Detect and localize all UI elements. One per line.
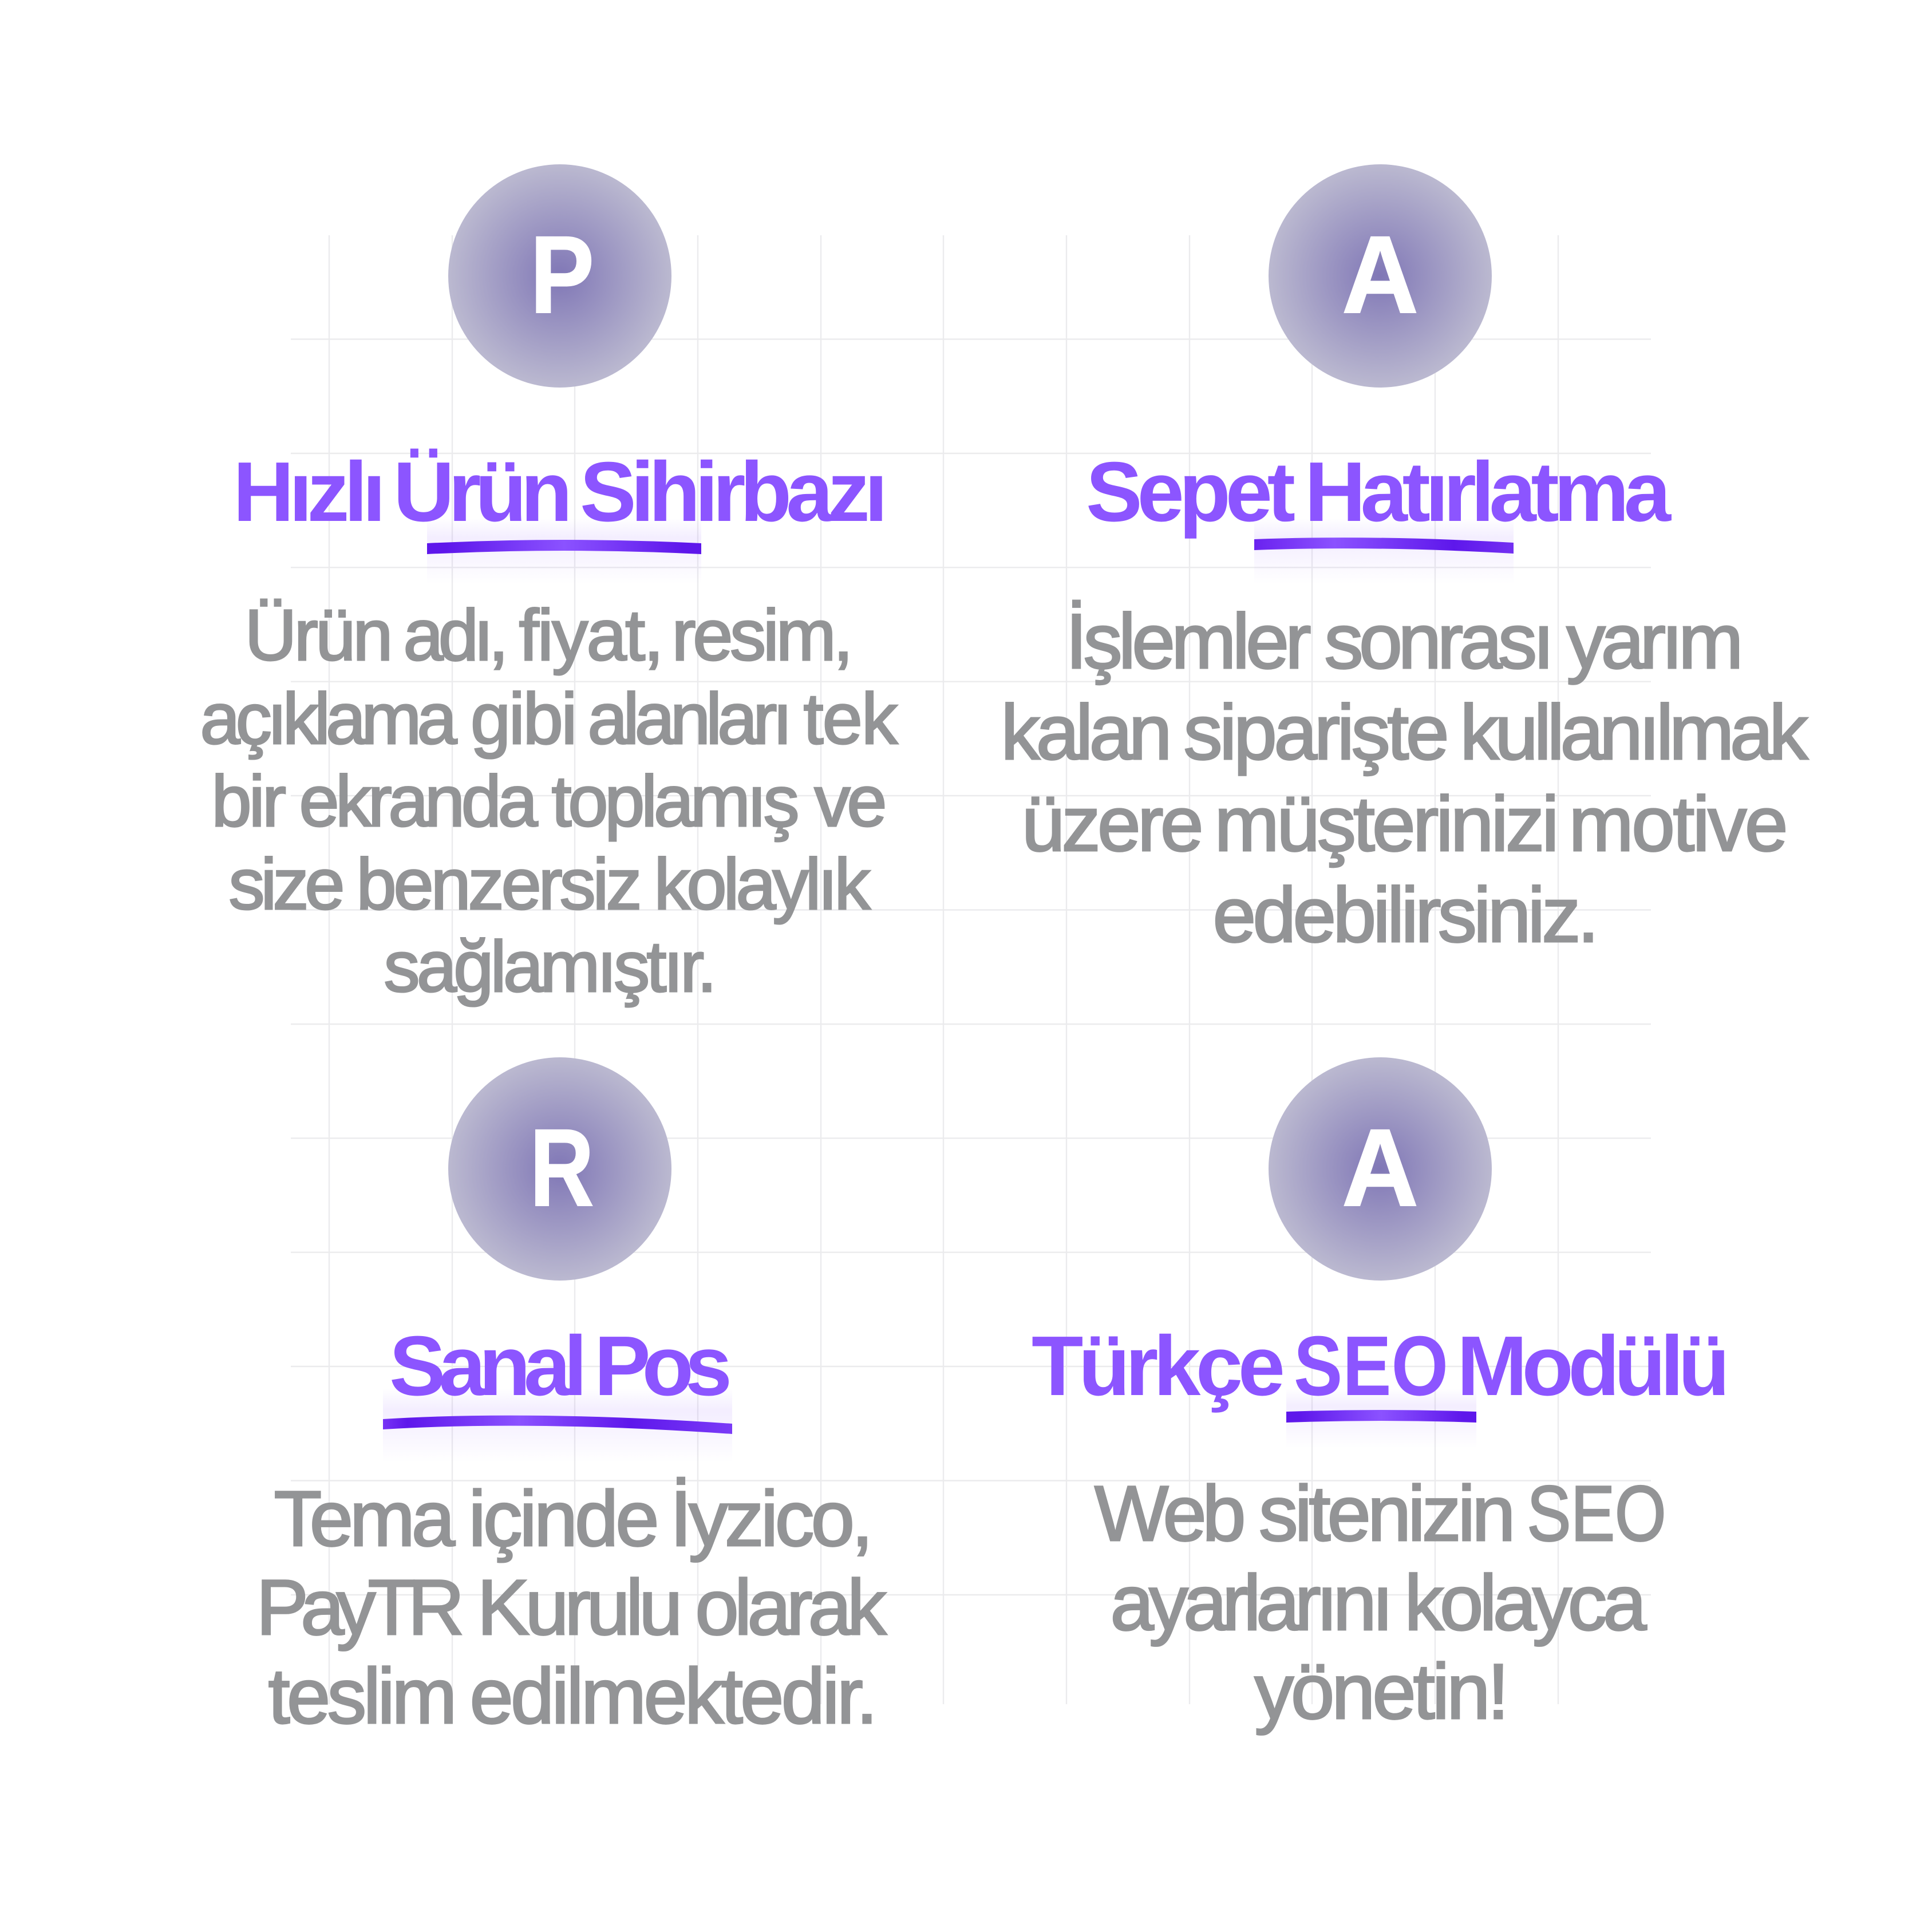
description text: içinde (468, 1475, 659, 1563)
description text: toplamış (552, 761, 799, 841)
description text: resim, (672, 595, 853, 675)
description text: fiyat, (519, 595, 664, 675)
heading (1032, 1319, 1730, 1413)
description text: ekranda (299, 761, 538, 841)
panel: Türkçe SEO Modülü (1032, 1057, 1730, 1736)
description text: kolayca (1405, 1559, 1647, 1647)
heading (389, 1319, 732, 1413)
description text: edebilirsiniz. (1212, 871, 1599, 958)
icon: letter A badge (1269, 164, 1492, 388)
panel: Sepet Hatırlatma (1001, 164, 1809, 958)
icon: letter A badge: A (1342, 1106, 1419, 1229)
heading: Sanal (389, 1319, 587, 1413)
description text: olarak (695, 1564, 887, 1652)
icon: letter R badge (448, 1057, 671, 1281)
description text: yarım (1566, 598, 1744, 685)
description text: PayTR (256, 1564, 465, 1652)
description text: SEO (1527, 1470, 1666, 1558)
heading underline (1286, 1388, 1476, 1448)
description text: İyzico, (670, 1475, 874, 1563)
heading: SEO (1294, 1319, 1448, 1413)
icon: letter R badge: R (530, 1106, 594, 1229)
heading: Ürün (393, 445, 572, 539)
description text: size (229, 844, 345, 924)
heading: Türkçe (1032, 1319, 1285, 1413)
icon: letter A badge: A (1342, 213, 1419, 336)
description text: kolaylık (654, 844, 871, 924)
description text: benzersiz (356, 844, 642, 924)
description text: yönetin! (1255, 1648, 1509, 1736)
description text: siparişte (1184, 689, 1449, 776)
description text: alanları (587, 678, 792, 759)
icon: letter P badge (448, 164, 671, 388)
description text: Ürün (245, 595, 393, 675)
description text: İşlemler (1066, 598, 1311, 685)
heading: Pos (594, 1319, 732, 1413)
description text: bir (212, 761, 286, 841)
description text: sağlamıştır. (384, 926, 717, 1007)
description text (200, 595, 898, 1007)
description text: adı, (403, 595, 508, 675)
panel: Sanal Pos (256, 1057, 887, 1740)
heading underline (427, 518, 701, 584)
description text: Kurulu (477, 1564, 682, 1652)
heading: Sihirbazı (580, 445, 888, 539)
heading: Hatırlatma (1305, 445, 1672, 539)
description text: Web (1095, 1470, 1246, 1558)
heading (233, 445, 888, 539)
description text: üzere (1021, 780, 1203, 867)
heading: Modülü (1457, 1319, 1730, 1413)
description text: müşterinizi (1215, 780, 1559, 867)
description text: açıklama (200, 678, 457, 759)
description text: gibi (471, 678, 577, 759)
description text: sitenizin (1259, 1470, 1516, 1558)
description text (1001, 598, 1809, 958)
heading: Hızlı (233, 445, 386, 539)
description text: kullanılmak (1460, 689, 1809, 776)
description text (256, 1475, 887, 1740)
description text: kalan (1001, 689, 1172, 776)
heading: Sepet (1086, 445, 1295, 539)
description text: sonrası (1325, 598, 1555, 685)
heading underline (383, 1388, 732, 1463)
description text (1095, 1470, 1666, 1736)
panel: Hızlı Ürün Sihirbazı (200, 164, 898, 1007)
description text: Tema (274, 1475, 456, 1563)
description text: ayarlarını (1111, 1559, 1393, 1647)
description text: motive (1568, 780, 1788, 867)
description text: edilmektedir. (469, 1653, 878, 1740)
icon: letter P badge: P (530, 213, 594, 336)
description text: tek (804, 678, 898, 759)
icon: letter A badge (1269, 1057, 1492, 1281)
description text: teslim (268, 1653, 457, 1740)
heading (1086, 445, 1672, 539)
description text: ve (814, 761, 887, 841)
heading underline (1254, 518, 1514, 584)
